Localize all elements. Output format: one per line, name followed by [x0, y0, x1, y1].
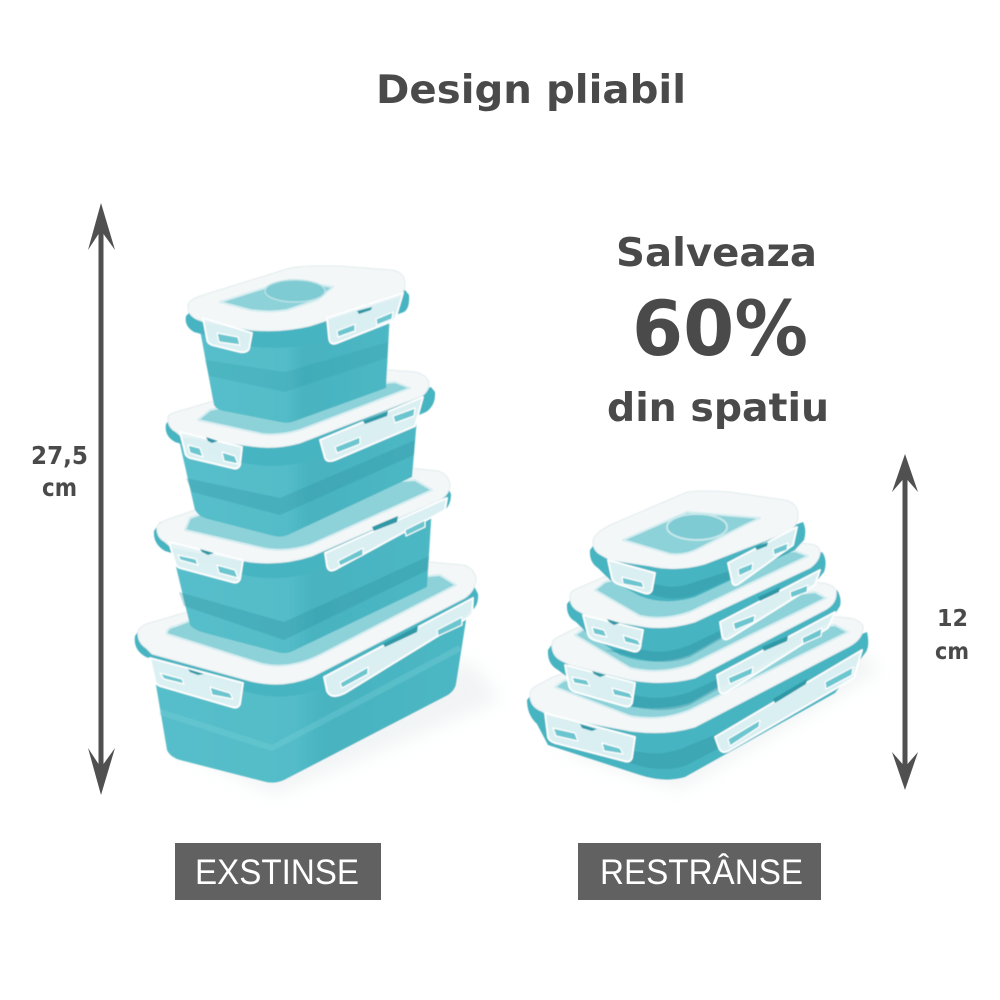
callout: space saving	[607, 231, 829, 431]
label: collapsed height value	[935, 606, 969, 665]
arrow: extended height	[88, 203, 115, 795]
label: extended height value: 27,5	[31, 441, 88, 470]
collapsed containers stack	[527, 491, 880, 790]
container: large extended	[135, 545, 478, 783]
container: medium-large extended	[154, 455, 451, 653]
container: small collapsed	[590, 491, 805, 601]
container: small extended	[186, 266, 409, 423]
extended containers stack	[135, 266, 500, 795]
label: extended height value	[31, 441, 88, 502]
callout: space saving: Salveaza	[616, 231, 817, 276]
label: extended height value: cm	[42, 473, 77, 502]
label: collapsed: RESTRÂNSE	[600, 853, 803, 892]
label: collapsed height value: cm	[935, 639, 969, 665]
lid valve	[265, 280, 325, 302]
label: collapsed height value: 12	[937, 606, 968, 632]
container: medium extended	[166, 370, 435, 537]
container: medium-large collapsed	[548, 582, 841, 710]
lid valve	[667, 514, 727, 540]
callout: space saving: din spatiu	[607, 386, 829, 431]
callout: space saving: 60%	[632, 284, 808, 373]
arrow: collapsed height	[892, 454, 918, 790]
label: extended	[175, 843, 381, 900]
label: extended: EXSTINSE	[195, 853, 359, 892]
container: medium collapsed	[567, 542, 826, 662]
container: large collapsed	[527, 616, 868, 780]
title: Design pliabil	[376, 68, 686, 113]
label: collapsed	[578, 843, 821, 900]
